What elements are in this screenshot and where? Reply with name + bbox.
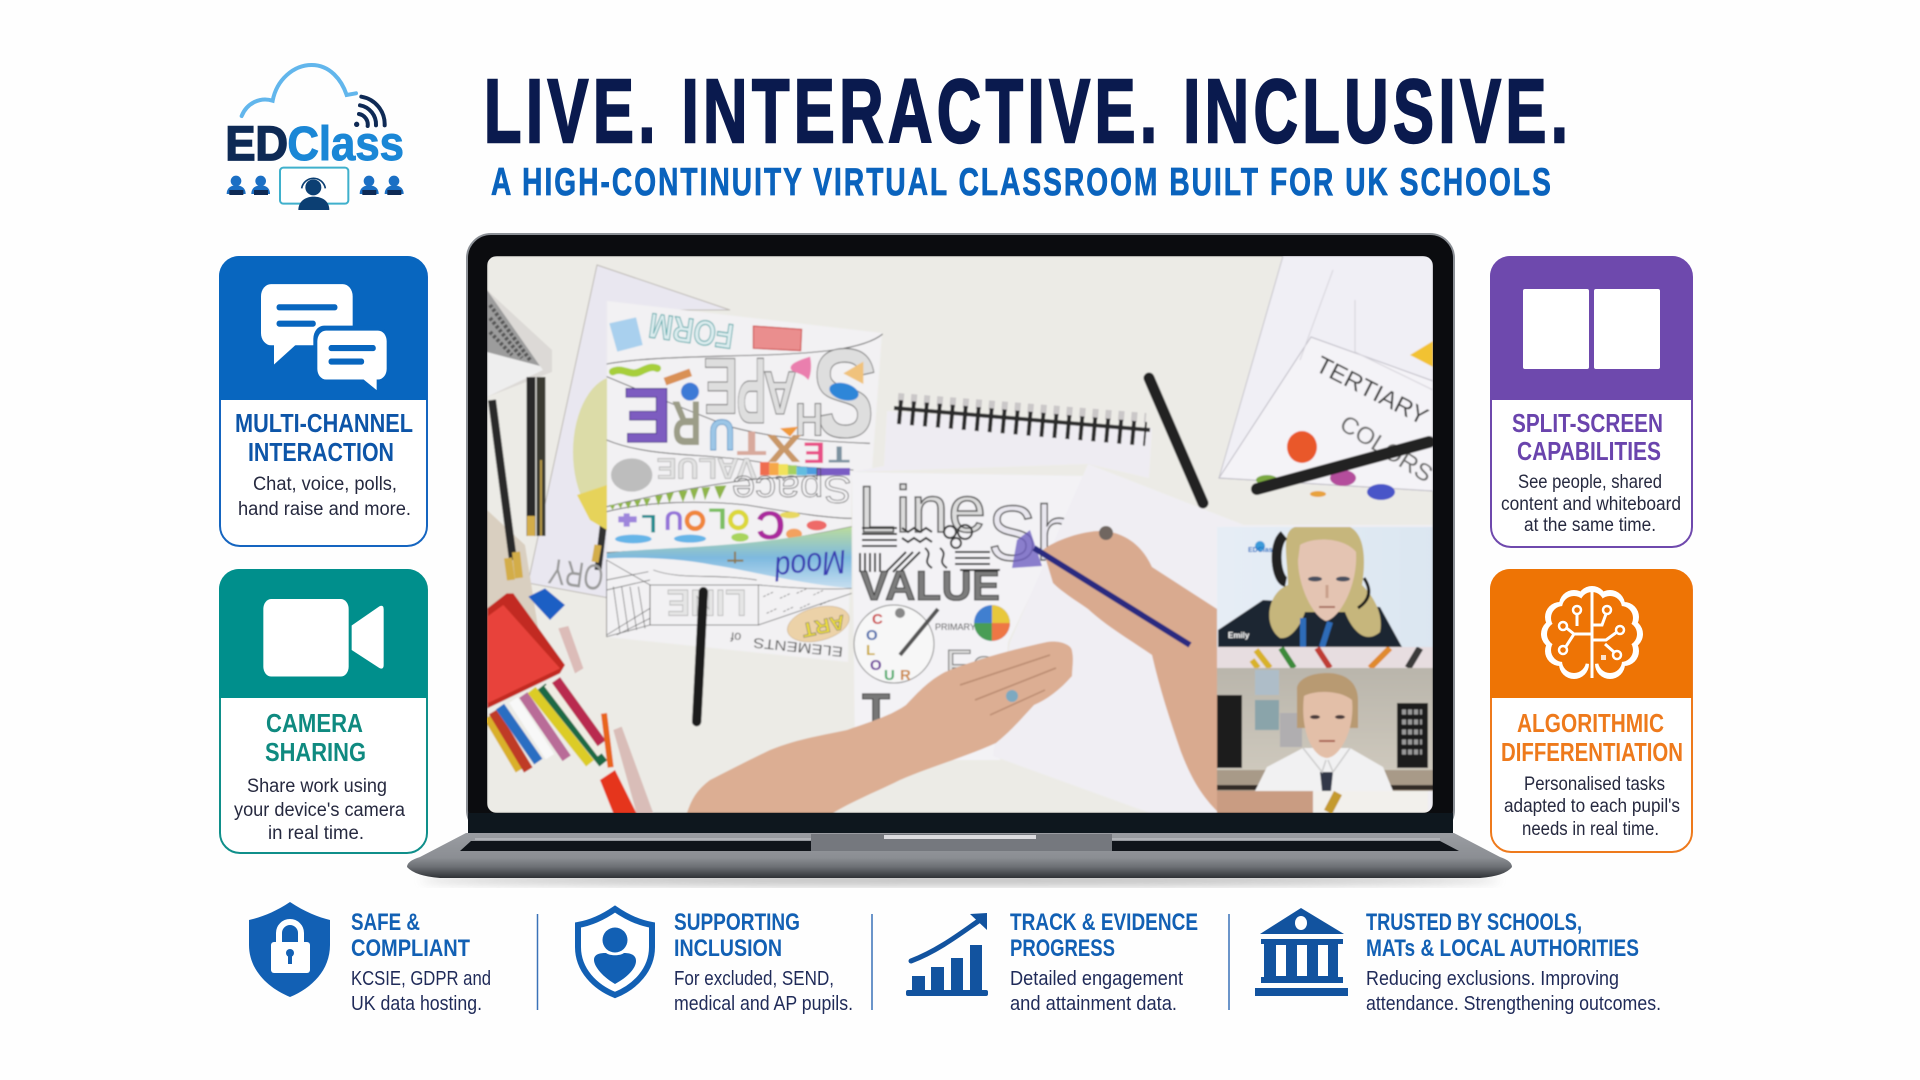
drawing arm and pencil (1034, 526, 1219, 813)
top-right papers (1219, 256, 1437, 500)
description: hand raise and more. (238, 499, 411, 520)
logo wordmark: Class (287, 117, 404, 171)
heading: SPLIT-SCREEN (1512, 408, 1663, 438)
panel: multi-channel interaction (219, 256, 427, 546)
feature: track and evidence progress (906, 909, 1198, 1015)
feature: trusted by schools (1255, 908, 1661, 1015)
heading: SUPPORTING (674, 909, 800, 936)
poster: line and value studies: VALUE (860, 562, 1000, 609)
heading: CAPABILITIES (1517, 436, 1661, 466)
description: your device's camera (234, 800, 405, 821)
back paper (528, 265, 730, 600)
heading: MULTI-CHANNEL (235, 408, 413, 438)
heading (265, 708, 366, 767)
top-right papers: TERTIARY (1311, 351, 1432, 431)
laptop base (407, 833, 1512, 878)
poster details (607, 305, 883, 553)
logo wordmark: ED (225, 117, 288, 171)
description (1010, 968, 1183, 1015)
laptop lid and bezel (467, 234, 1454, 834)
description: in real time. (268, 823, 364, 844)
icon: video camera (263, 599, 384, 677)
black pen (1149, 378, 1203, 503)
desk surface (487, 256, 1433, 813)
description (1366, 968, 1661, 1015)
description: See people, shared (1518, 472, 1662, 493)
SHAPE letters (704, 347, 875, 440)
heading (351, 909, 470, 962)
title: LIVE. INTERACTIVE. INCLUSIVE. (484, 61, 1568, 162)
icon: shield with person (578, 909, 652, 995)
TEXTURE letters: R (672, 388, 702, 458)
poster: line and value studies (852, 482, 1065, 722)
icon: cloud outline (242, 65, 356, 116)
poster: line and value studies: U (884, 667, 895, 684)
large white paper (993, 464, 1433, 813)
resting hand (687, 642, 1073, 813)
panel: algorithmic differentiation (1490, 569, 1692, 852)
TEXTURE letters: T (828, 442, 850, 468)
SHAPE letters: E (703, 341, 738, 430)
feature: supporting inclusion (578, 909, 853, 1015)
TEXTURE letters: E (803, 436, 825, 469)
TEXTURE letters: U (708, 410, 735, 458)
faded back paper text: ORY (546, 550, 606, 599)
icon: brain circuit (1541, 586, 1643, 679)
poster: line and value studies: O (870, 657, 882, 674)
poster details: VALUE (657, 451, 757, 483)
feature: safe and compliant (249, 902, 491, 1015)
icon: chat bubbles (261, 284, 388, 390)
heading: INTERACTION (248, 437, 394, 467)
panel: split-screen capabilities (1490, 256, 1692, 547)
poster details: L (641, 509, 657, 537)
description: at the same time. (1524, 515, 1656, 536)
screen: live classroom video: Mood (772, 542, 848, 586)
icon: shield with padlock (249, 902, 330, 997)
description: medical and AP pupils. (674, 993, 853, 1015)
description: Reducing exclusions. Improving (1366, 968, 1619, 990)
description: needs in real time. (1522, 819, 1659, 840)
poster: line and value studies: Line (858, 472, 986, 546)
strip between webcam tiles (1217, 647, 1433, 668)
mini logo: EDClass (1248, 547, 1277, 554)
poster details: L (708, 501, 727, 534)
icon: split screen (1523, 289, 1660, 369)
heading (674, 909, 800, 962)
heading (1010, 909, 1198, 962)
poster: line and value studies: R (900, 667, 911, 684)
description (674, 968, 853, 1015)
description: and attainment data. (1010, 993, 1177, 1015)
poster: line and value studies: Sh (988, 489, 1076, 577)
poster: line and value studies: T (862, 684, 890, 736)
heading (1366, 909, 1639, 962)
heading: SAFE & (351, 909, 420, 936)
description (238, 474, 411, 520)
screen: live classroom video: of (730, 629, 742, 644)
logo: EDClass (225, 65, 404, 210)
yellow disc (572, 378, 608, 530)
webcam tile: teacher Emily: Emily (1228, 631, 1250, 640)
top-right papers: COLORS (1335, 410, 1437, 488)
screen: live classroom video: ELEMENTS (752, 635, 844, 660)
description: Chat, voice, polls, (253, 474, 397, 495)
description: content and whiteboard (1501, 494, 1681, 515)
poster: line and value studies: L (866, 642, 875, 659)
arm below webcam tiles (1216, 790, 1343, 813)
screen: live classroom video: LINE (667, 582, 747, 623)
icon: institution building (1255, 908, 1348, 996)
spiral notebook (852, 398, 1152, 478)
poster details: Space (732, 468, 852, 511)
SHAPE letters: H (795, 393, 823, 445)
heading (1501, 708, 1683, 767)
description: Personalised tasks (1524, 774, 1665, 795)
heading: ALGORITHMIC (1517, 708, 1664, 738)
second art poster (852, 472, 1088, 760)
heading (1512, 408, 1663, 466)
heading (235, 408, 413, 467)
panel: camera sharing (219, 569, 427, 853)
heading: COMPLIANT (351, 935, 470, 962)
icon: teacher on screen (280, 168, 348, 210)
heading: PROGRESS (1010, 935, 1115, 962)
description: adapted to each pupil's (1504, 796, 1680, 817)
heading: INCLUSION (674, 935, 782, 962)
poster details: U (664, 506, 683, 536)
description: KCSIE, GDPR and (351, 968, 491, 990)
laptop shadow (420, 875, 1500, 885)
screen: live classroom video (487, 256, 1437, 813)
description (234, 776, 405, 844)
description (1504, 774, 1680, 840)
poster: line and value studies: C (872, 611, 883, 628)
subtitle: A HIGH-CONTINUITY VIRTUAL CLASSROOM BUILT FOR UK SCHOOLS (491, 161, 1551, 204)
webcam tile: teacher Emily (1217, 527, 1433, 647)
poster: line and value studies: Fo (945, 641, 996, 690)
logo wordmark (225, 117, 404, 171)
description: Detailed engagement (1010, 968, 1183, 990)
SHAPE letters: A (763, 358, 797, 427)
screen: live classroom video: ART (800, 610, 847, 641)
TEXTURE letters: E (623, 371, 672, 457)
icon: pupils (227, 176, 404, 195)
SHAPE letters: P (737, 338, 767, 442)
SHAPE letters: S (813, 322, 877, 464)
poster details: FORM (647, 305, 736, 356)
description: UK data hosting. (351, 993, 482, 1015)
icon: wifi signal (354, 97, 385, 127)
left pencils and printed sheet (487, 290, 604, 640)
heading: TRACK & EVIDENCE (1010, 909, 1198, 936)
TEXTURE letters (624, 387, 850, 464)
mini logo (1248, 541, 1277, 554)
poster: line and value studies: O (866, 627, 878, 644)
description: For excluded, SEND, (674, 968, 834, 990)
TEXTURE letters: T (737, 424, 767, 462)
heading: CAMERA (266, 708, 363, 738)
heading: TRUSTED BY SCHOOLS, (1366, 909, 1582, 936)
heading: MATs & LOCAL AUTHORITIES (1366, 935, 1639, 962)
laptop (407, 234, 1512, 885)
description: attendance. Strengthening outcomes. (1366, 993, 1661, 1015)
heading: DIFFERENTIATION (1501, 737, 1683, 767)
icon: rising bar chart (906, 913, 988, 996)
main art poster (607, 301, 882, 662)
description (1501, 472, 1681, 536)
description: Share work using (247, 776, 387, 797)
description (351, 968, 491, 1015)
TEXTURE letters: X (766, 426, 802, 469)
poster details: C (756, 503, 785, 547)
poster: line and value studies: PRIMARY (935, 622, 976, 632)
heading: SHARING (265, 737, 366, 767)
webcam tile: pupil (1217, 668, 1433, 791)
